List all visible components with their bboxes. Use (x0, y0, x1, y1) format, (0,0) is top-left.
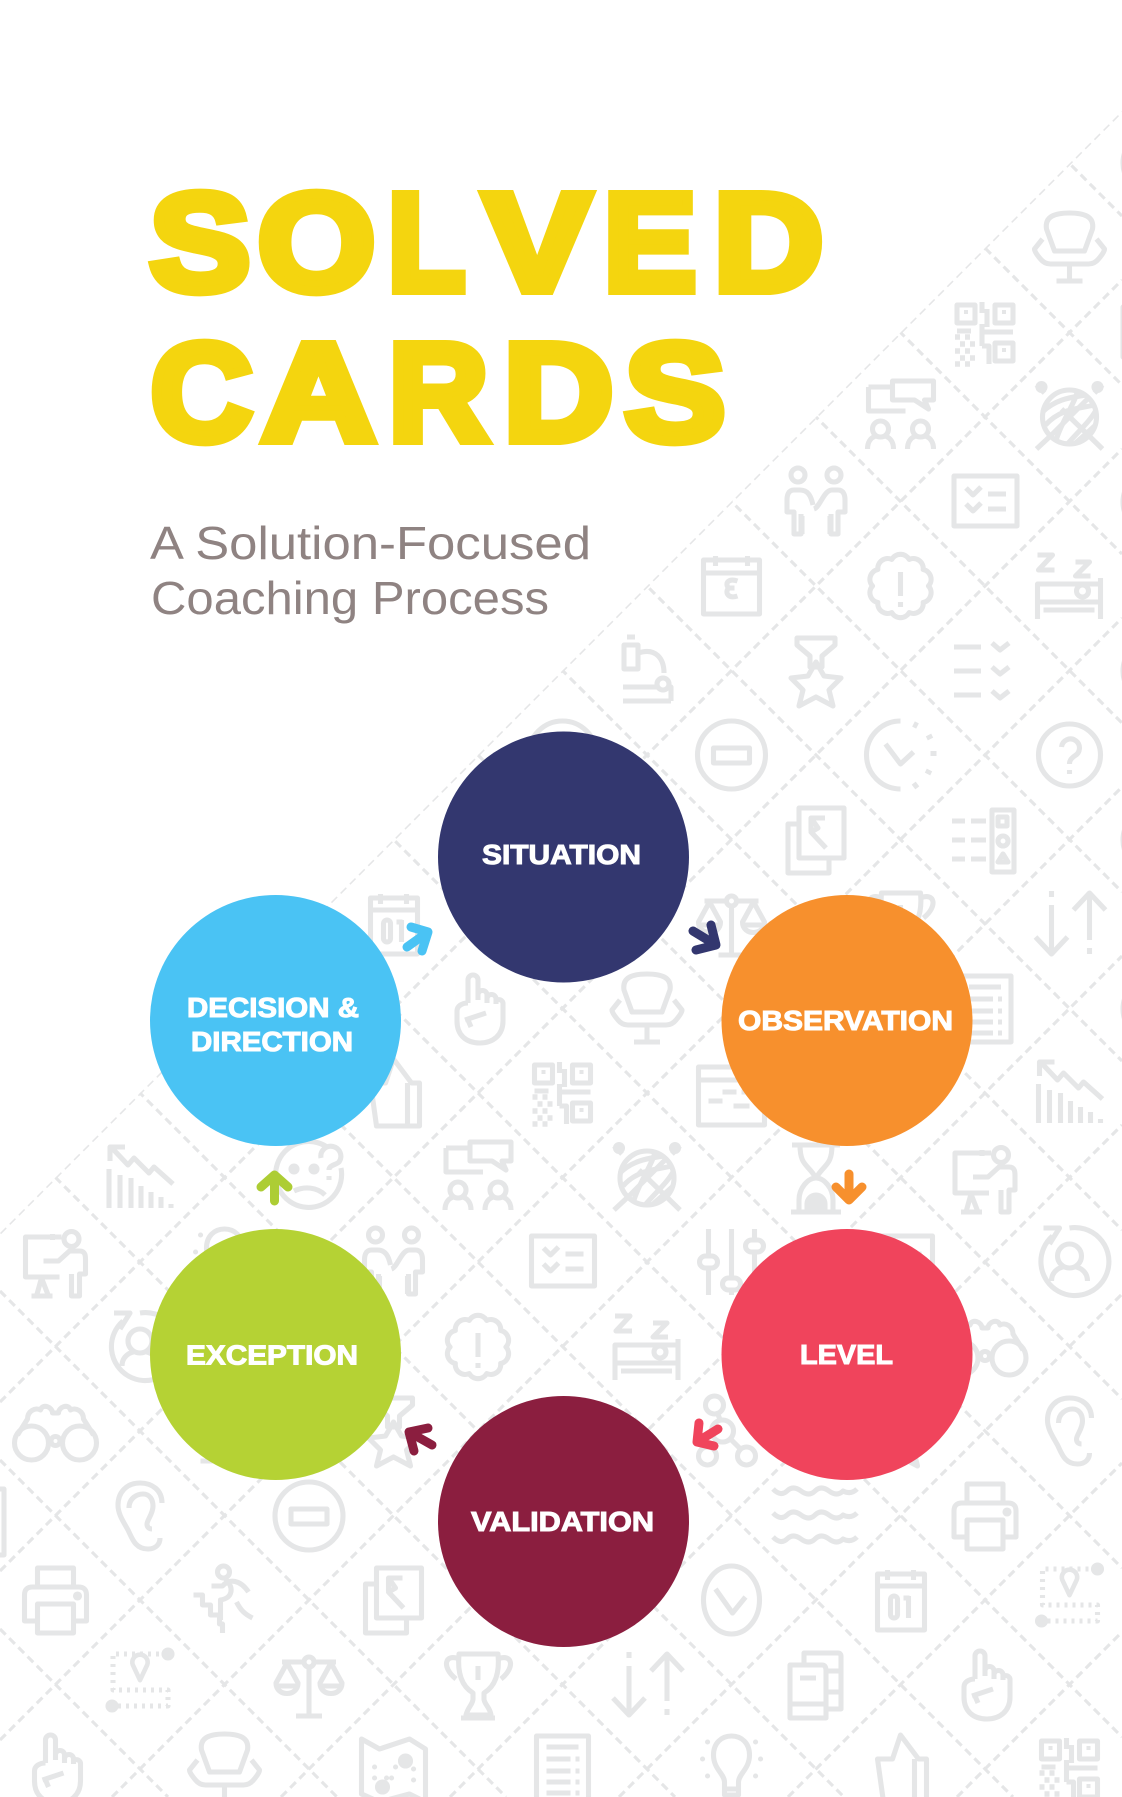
circle: level: LEVEL (800, 1339, 893, 1370)
arrow: level to validation (697, 1423, 718, 1446)
circle: observation (722, 895, 972, 1146)
circle: observation: OBSERVATION (738, 1005, 953, 1036)
circle: validation (438, 1396, 689, 1647)
arrow: validation to exception (409, 1428, 432, 1451)
title: S (150, 166, 250, 320)
circle: level (722, 1229, 972, 1480)
title: E (604, 166, 696, 320)
title: D (504, 316, 613, 470)
subtitle: Coaching Process (151, 572, 549, 624)
circle: situation (438, 732, 689, 982)
arrow: situation to observation (693, 925, 716, 950)
title: L (388, 166, 465, 320)
title (150, 166, 823, 470)
title: R (389, 316, 488, 470)
circle: exception: EXCEPTION (186, 1340, 358, 1370)
title: D (714, 166, 823, 320)
circle: decision and direction: DIRECTION (191, 1026, 353, 1057)
title: V (484, 166, 590, 320)
circle: decision and direction: DECISION & (187, 992, 359, 1023)
circle: exception (150, 1229, 401, 1480)
title: S (625, 316, 725, 470)
circle: validation: VALIDATION (471, 1506, 654, 1537)
subtitle (150, 517, 591, 624)
title: A (262, 316, 375, 470)
subtitle: A Solution-Focused (150, 517, 591, 569)
process cycle (150, 732, 972, 1647)
arrow: observation to level (836, 1174, 862, 1200)
arrow: exception to decision (261, 1175, 288, 1201)
circle: decision and direction (150, 895, 401, 1146)
title: O (258, 166, 375, 320)
circle: situation: SITUATION (482, 839, 641, 870)
arrow: decision to situation (407, 927, 428, 951)
title: C (151, 316, 252, 470)
